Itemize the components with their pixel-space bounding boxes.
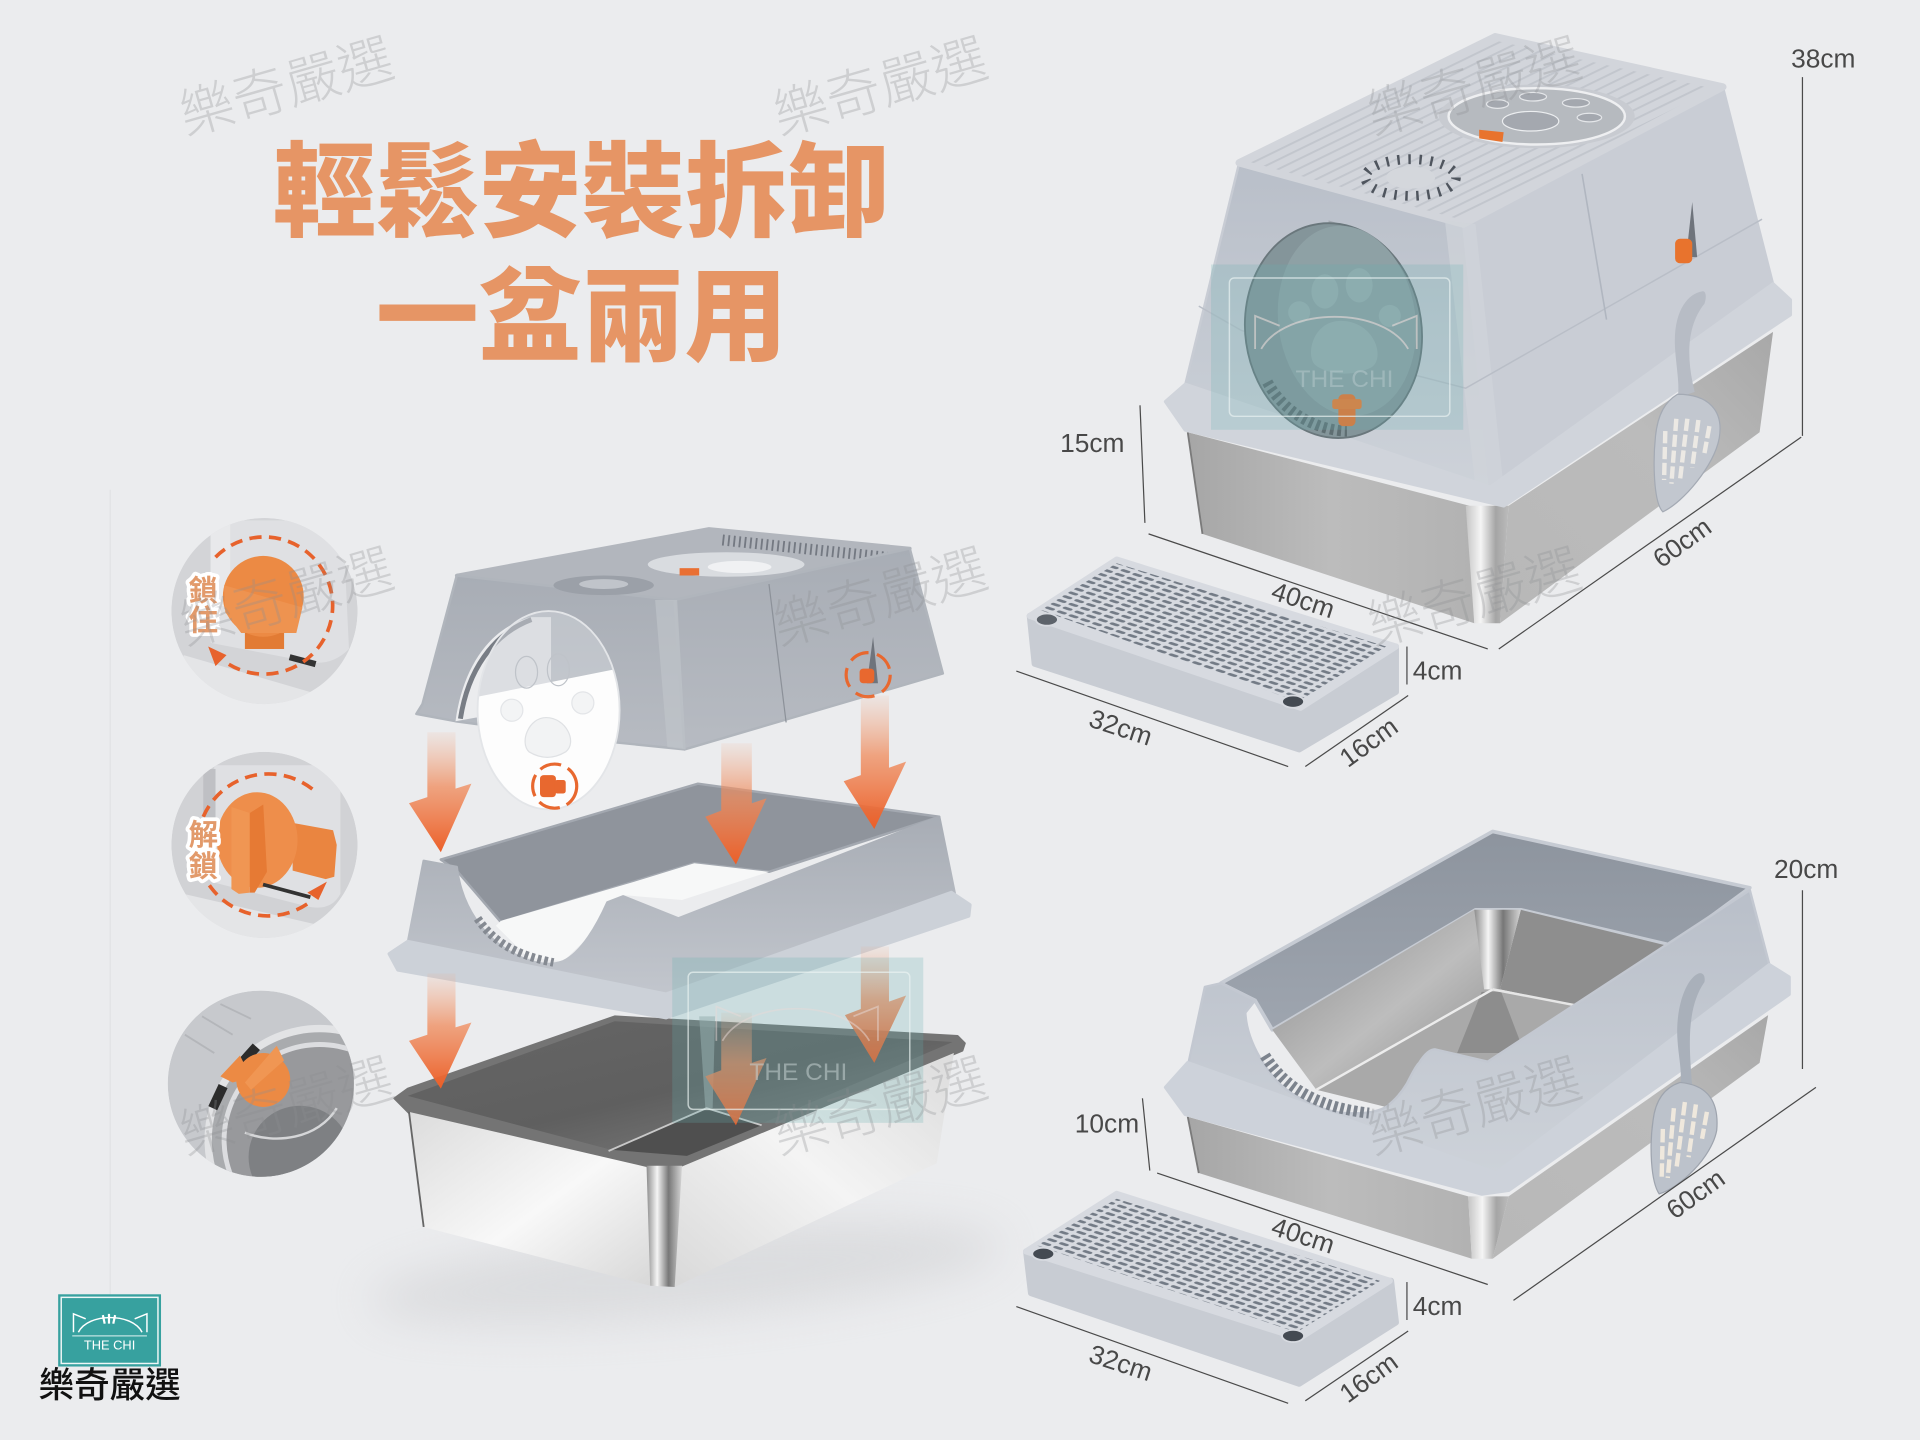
dimensions: open box: 20cm xyxy=(1774,854,1838,884)
dimensions: open box: 16cm xyxy=(1334,1347,1403,1409)
front walls xyxy=(1188,890,1769,1173)
door window xyxy=(1231,212,1436,450)
watermarks: 樂奇嚴選 xyxy=(766,27,994,147)
side latch xyxy=(1675,202,1697,263)
scoop xyxy=(1651,973,1717,1194)
dimensions: closed box: 60cm xyxy=(1647,511,1717,574)
interior wall xyxy=(1221,831,1750,1030)
scoop xyxy=(1654,291,1720,512)
watermarks: 樂奇嚴選 xyxy=(1360,27,1588,147)
dimensions: open box: 4cm xyxy=(1413,1291,1462,1321)
logo xyxy=(39,1294,181,1405)
lid body xyxy=(1185,37,1773,487)
label: locked: 住 xyxy=(189,605,218,638)
panel: unlock detail xyxy=(172,752,358,938)
watermarks xyxy=(172,27,1588,1167)
arrow xyxy=(705,1013,767,1125)
logo: 樂奇嚴選 xyxy=(39,1365,181,1405)
rim xyxy=(1166,965,1789,1194)
logo: THE CHI xyxy=(84,1337,135,1352)
rim xyxy=(1166,284,1790,506)
dimensions: open box: 32cm xyxy=(1086,1339,1156,1387)
title: 一盆兩用 xyxy=(376,260,787,375)
dimensions: open box: 60cm xyxy=(1661,1163,1730,1225)
dimensions: open box: 10cm xyxy=(1075,1109,1139,1139)
title: 輕鬆安裝拆卸 xyxy=(273,135,890,250)
label: locked: 鎖 xyxy=(189,575,218,608)
logo watermark: exploded view: THE CHI xyxy=(749,1059,847,1086)
dimensions: open box: 40cm xyxy=(1268,1211,1338,1260)
arrow xyxy=(409,732,471,852)
panel: open box xyxy=(1166,831,1789,1259)
watermarks: 樂奇嚴選 xyxy=(172,1047,400,1167)
arrows xyxy=(409,696,906,1125)
logo watermark: exploded view xyxy=(672,958,923,1123)
dimensions: open box xyxy=(1016,854,1838,1409)
watermarks: 樂奇嚴選 xyxy=(172,27,400,147)
panel: door latch detail xyxy=(168,990,354,1177)
watermarks: 樂奇嚴選 xyxy=(766,1047,994,1167)
entrance arch xyxy=(456,617,551,735)
watermarks: 樂奇嚴選 xyxy=(172,538,400,658)
mat: open box xyxy=(1026,1194,1396,1384)
side latch rotate icon xyxy=(846,637,890,697)
tray shadow xyxy=(365,1202,1007,1345)
door latch rotate icon xyxy=(533,764,577,808)
label: unlocked: 解 xyxy=(189,819,218,852)
dimensions: closed box: 4cm xyxy=(1413,656,1462,686)
stainless steel tray xyxy=(394,1016,965,1287)
translucent door xyxy=(476,610,620,808)
dimensions: closed box xyxy=(1016,43,1855,773)
label: unlocked: 鎖 xyxy=(189,851,218,884)
logo watermark: THE CHI xyxy=(1296,366,1393,393)
watermarks: 樂奇嚴選 xyxy=(766,538,994,658)
arrow xyxy=(844,696,906,829)
watermarks: 樂奇嚴選 xyxy=(1360,1047,1588,1167)
mat: closed box xyxy=(1030,560,1396,749)
steel base xyxy=(1188,1015,1768,1259)
steel base xyxy=(1188,332,1773,623)
dimensions: closed box: 32cm xyxy=(1086,703,1156,752)
arrow xyxy=(705,743,767,864)
lid xyxy=(416,529,943,820)
title xyxy=(273,135,890,375)
steel interior xyxy=(1272,910,1670,1107)
vent xyxy=(1365,159,1456,196)
panel: lock detail xyxy=(172,518,358,704)
dimensions: closed box: 38cm xyxy=(1791,43,1855,73)
dimensions: closed box: 15cm xyxy=(1060,428,1124,458)
dimensions: closed box: 40cm xyxy=(1268,576,1338,624)
ring frame xyxy=(389,784,970,1018)
panel: closed box xyxy=(1166,37,1790,623)
arrow xyxy=(409,973,471,1089)
watermarks: 樂奇嚴選 xyxy=(1360,538,1588,658)
arrow xyxy=(845,947,906,1063)
dimensions: closed box: 16cm xyxy=(1334,711,1403,773)
top paw window xyxy=(1439,84,1635,148)
logo watermark xyxy=(1211,264,1463,430)
